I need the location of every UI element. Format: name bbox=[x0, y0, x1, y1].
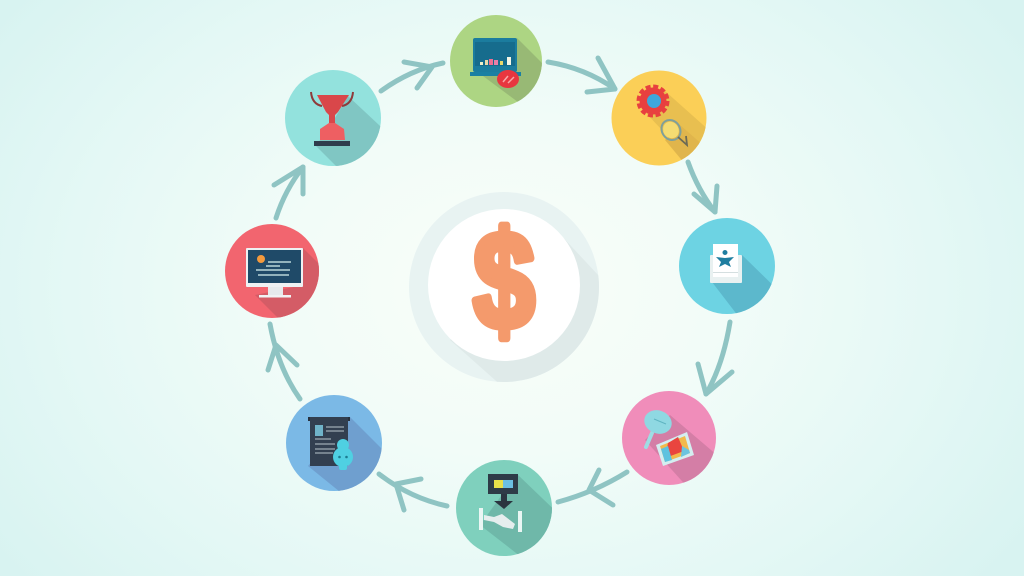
arrow: green to yellow bbox=[548, 58, 615, 92]
node: lollipop and photo bbox=[622, 391, 716, 485]
icon: magnifier bbox=[658, 116, 687, 145]
icon: trophy bbox=[311, 92, 353, 146]
icon: handshake bbox=[479, 508, 522, 532]
arrow: red to aqua bbox=[274, 167, 303, 218]
center dollar medallion bbox=[409, 192, 599, 382]
node: trophy bbox=[285, 70, 381, 166]
icon: cyan figure bbox=[333, 439, 353, 470]
arrow: blue to red bbox=[268, 324, 300, 399]
icon: small monitor bbox=[488, 474, 518, 509]
arrow: yellow to cyan bbox=[688, 162, 717, 212]
node: monitor and handshake bbox=[456, 460, 552, 556]
icon: lollipop bbox=[641, 406, 675, 447]
arrow: pink to teal bbox=[558, 470, 627, 505]
icon: board bbox=[308, 417, 350, 466]
node: document with star bbox=[679, 218, 775, 314]
icon: laptop bbox=[470, 38, 521, 88]
arrow: teal to blue bbox=[379, 474, 447, 510]
arrow: cyan to pink bbox=[698, 322, 732, 394]
arrow: aqua to green bbox=[381, 62, 443, 91]
icon: document bbox=[710, 244, 742, 283]
node: gear and magnifier bbox=[612, 70, 706, 166]
icon: monitor bbox=[246, 248, 303, 298]
dollar sign: $ bbox=[473, 204, 535, 358]
node: desktop monitor bbox=[225, 224, 319, 318]
icon: photo bbox=[656, 432, 694, 466]
node: laptop analytics bbox=[450, 15, 542, 107]
node: notice board bbox=[286, 395, 382, 491]
icon: gear bbox=[638, 86, 668, 116]
